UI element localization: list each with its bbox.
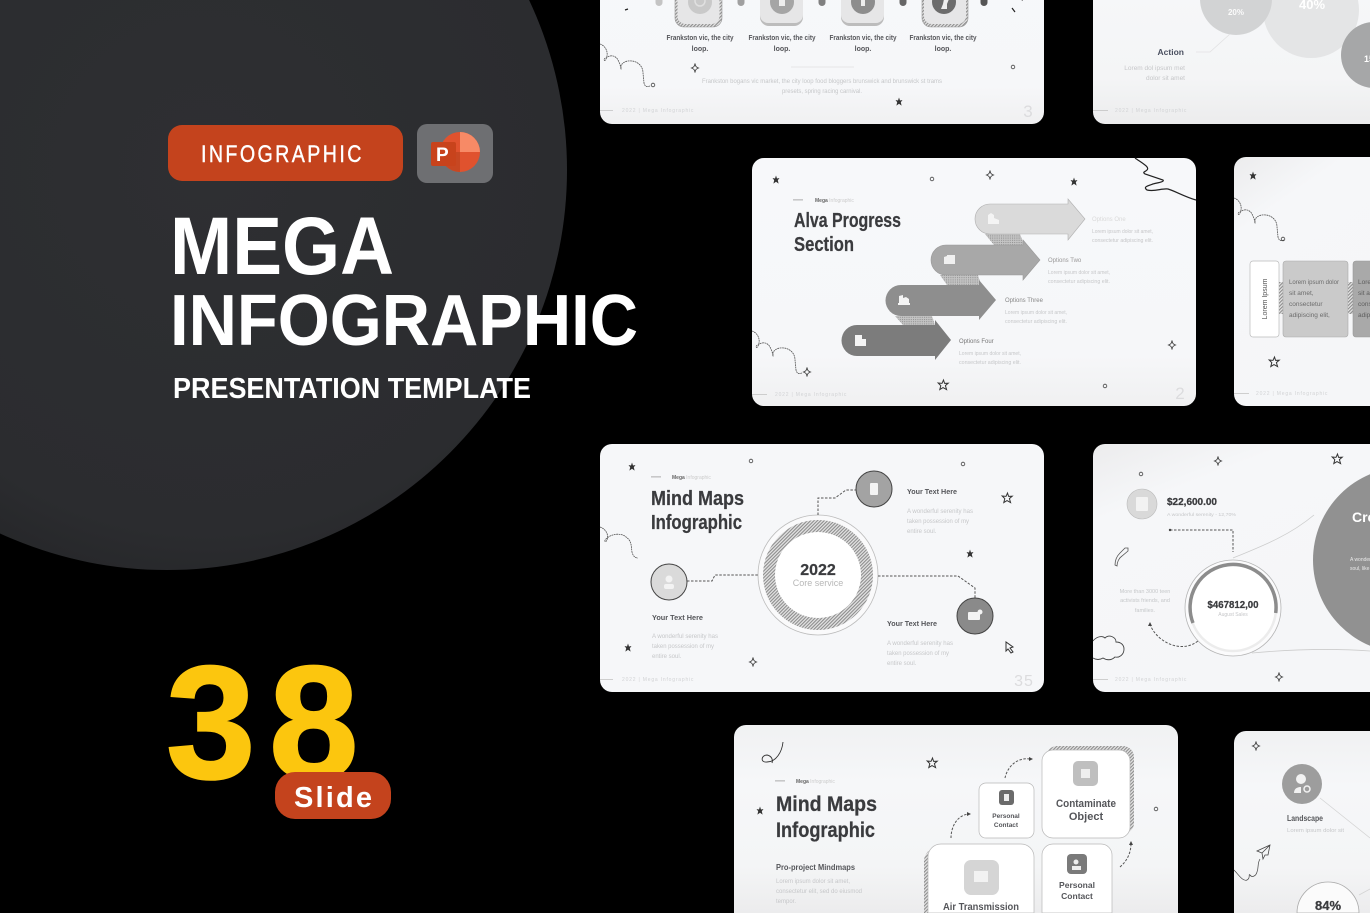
title: INFOGRAPHIC — [170, 281, 638, 361]
panel: Mind Maps 2022 slide — [600, 444, 1044, 692]
panel: Mind Maps 2022 slide: Mega Infographic — [672, 475, 711, 481]
panel: slide 3 icons row: 2022 | Mega Infographic — [622, 108, 694, 114]
panel: Alva Progress slide: 2 — [1175, 384, 1185, 403]
text: pro-project mindmaps: tempor. — [776, 899, 796, 905]
subtitle: PRESENTATION TEMPLATE — [173, 373, 531, 405]
panel: Lorem Ipsum process slide: Lorem Ipsum — [1262, 278, 1269, 319]
card: personal contact large: Personal — [1059, 880, 1095, 890]
badge: infographic: INFOGRAPHIC — [201, 140, 364, 167]
chart: august sales gauge: $467812,00 — [1208, 600, 1259, 611]
heading — [794, 210, 901, 256]
panel: slide 3 icons row: presets, spring racing carnival. — [782, 88, 862, 95]
chart: stepped arrows — [842, 199, 1085, 360]
text: pro-project mindmaps: consectetur elit, sed do eiusmod — [776, 889, 862, 895]
panel: slide 3 icons row: Frankston bogans vic market, the city loop food bloggers brunswick and brunswick st trams — [702, 78, 943, 85]
icon: left node — [651, 564, 687, 600]
panel: landscape slide: Landscape — [1287, 814, 1323, 823]
text: options: consectetur adipiscing elit. — [1005, 319, 1067, 325]
icon: PowerPoint logo: P — [436, 145, 449, 166]
chart: august sales gauge — [1185, 560, 1281, 656]
text: options — [959, 217, 1153, 366]
heading: Mind Maps — [651, 488, 744, 510]
text: your text here blocks: taken possession of my — [652, 644, 714, 650]
panel: slide 3 icons row: Frankston vic, the city — [666, 35, 734, 42]
panel: slide 3 icons row — [600, 0, 1044, 124]
text: options: Lorem ipsum dolor sit amet, — [1092, 229, 1153, 235]
panel: slide 3 icons row: loop. — [692, 46, 708, 53]
title — [170, 201, 638, 361]
panel: Mind Maps 2022 slide: 35 — [1014, 673, 1034, 690]
panel: Lorem Ipsum process slide: consectetur — [1289, 301, 1323, 308]
panel: slide action bubbles — [1093, 0, 1370, 124]
card: air transmission: Air Transmission — [943, 902, 1019, 913]
panel: Lorem Ipsum process slide: 2022 | Mega Infographic — [1256, 391, 1328, 397]
chart: 84 percent circle: 84% — [1315, 898, 1341, 913]
heading — [651, 488, 744, 534]
heading: Section — [794, 234, 854, 256]
panel: Alva Progress slide: Mega Infographic — [815, 198, 854, 204]
icon: wallet circle — [1127, 489, 1157, 519]
panel: slide action bubbles: 20% — [1228, 8, 1244, 17]
icon: rocket — [1115, 548, 1128, 566]
heading: Infographic — [651, 512, 742, 534]
heading: Infographic — [776, 819, 875, 842]
icon: paper plane — [1257, 845, 1270, 859]
card: small personal contact: Contact — [994, 822, 1019, 829]
card: contaminate object: Object — [1069, 811, 1103, 823]
text: options: Options Two — [1048, 258, 1082, 264]
chart: august sales gauge: August Sales — [1218, 612, 1248, 618]
text: your text here blocks: A wonderful serenity has — [652, 634, 718, 640]
text: options: Options One — [1092, 217, 1126, 223]
text: your text here blocks: taken possession of my — [907, 519, 969, 525]
panel: slide 3 icons row: Frankston vic, the city — [748, 35, 816, 42]
icon: PowerPoint logo — [417, 124, 493, 183]
slide count number: 3 — [166, 633, 256, 813]
panel: Mind Maps 2022 slide: 2022 | Mega Infographic — [622, 677, 694, 683]
panel: sales slide: A wonderful serenity - 12,70% — [1167, 512, 1237, 518]
panel: slide 3 icons row: 3 — [1023, 102, 1033, 121]
chart: core circle: Core service — [793, 578, 843, 588]
panel: sales slide: $22,600.00 — [1167, 497, 1217, 508]
title: MEGA — [170, 201, 394, 292]
panel: Alva Progress slide: 2022 | Mega Infographic — [775, 392, 847, 398]
text: options: consectetur adipiscing elit. — [1092, 238, 1153, 244]
text: options: Lorem ipsum dolor sit amet, — [1005, 310, 1067, 316]
text: pro-project mindmaps: Pro-project Mindmaps — [776, 863, 856, 872]
panel: sales slide — [1093, 444, 1370, 692]
panel: Lorem Ipsum process slide — [1234, 157, 1370, 406]
panel: sales slide: families. — [1135, 608, 1156, 614]
heading — [776, 793, 877, 842]
panel: sales slide: 2022 | Mega Infographic — [1115, 677, 1187, 683]
text: your text here blocks: taken possession of my — [887, 651, 949, 657]
panel: slide action bubbles: Action — [1158, 47, 1184, 57]
panel: Alva Progress slide — [752, 158, 1196, 406]
card: personal contact large — [1042, 844, 1112, 913]
card: small personal contact: Personal — [992, 813, 1020, 820]
panel: slide 3 icons row: loop. — [774, 46, 790, 53]
text: your text here blocks: entire soul. — [652, 654, 682, 660]
panel: Mind Maps boxes slide — [734, 725, 1178, 913]
panel: sales slide: activists friends, and — [1120, 598, 1170, 604]
icon: right node — [957, 598, 993, 634]
chart: core circle: 2022 — [800, 562, 836, 579]
decorative marks — [752, 158, 1196, 390]
card: contaminate object: Contaminate — [1056, 798, 1116, 810]
panel: Lorem Ipsum process slide: Lorem ipsum dolor — [1289, 279, 1340, 286]
panel: landscape slide — [1234, 731, 1370, 913]
text: options: Options Four — [959, 339, 994, 345]
panel: slide action bubbles: 2022 | Mega Infographic — [1115, 108, 1187, 114]
panel: slide 3 icons row: loop. — [935, 46, 951, 53]
heading: Mind Maps — [776, 793, 877, 816]
dark circle backdrop — [0, 0, 567, 570]
card: small personal contact — [979, 783, 1034, 838]
heading: Alva Progress — [794, 210, 901, 232]
panel: Mind Maps boxes slide: Mega Infographic — [796, 779, 835, 785]
panel: landscape slide: Lorem ipsum dolor sit — [1287, 828, 1345, 834]
panel: sales slide: More than 3000 teen — [1120, 589, 1170, 595]
icon: top node — [856, 471, 892, 507]
panel: slide action bubbles: Lorem dol ipsum met — [1124, 65, 1185, 72]
text: your text here blocks: Your Text Here — [887, 621, 937, 628]
icon: landscape circle — [1282, 764, 1322, 804]
text: options: Lorem ipsum dolor sit amet, — [1048, 270, 1110, 276]
card: personal contact large: Contact — [1061, 891, 1093, 901]
slide count number — [166, 633, 359, 813]
text: pro-project mindmaps — [776, 863, 862, 905]
panel: Lorem Ipsum process slide: adipiscing elit, — [1289, 312, 1330, 319]
text: options: consectetur adipiscing elit. — [1048, 279, 1110, 285]
panel: slide 3 icons row: Frankston vic, the city — [830, 35, 897, 42]
panel: slide 3 icons row: Frankston vic, the city — [910, 35, 977, 42]
panel: slide 3 icons row: loop. — [855, 46, 871, 53]
text: your text here blocks: entire soul. — [887, 661, 917, 667]
panel: slide action bubbles: dolor sit amet — [1146, 75, 1185, 82]
card: air transmission — [924, 844, 1034, 913]
chart: 84 percent circle — [1297, 882, 1359, 913]
card: contaminate object — [1042, 746, 1134, 838]
text: your text here blocks: A wonderful serenity has — [907, 509, 973, 515]
icon: cloud — [1093, 636, 1124, 660]
text: your text here blocks: Your Text Here — [652, 615, 703, 622]
badge: infographic — [168, 125, 403, 181]
chart: core circle — [758, 515, 878, 635]
text: options: Lorem ipsum dolor sit amet, — [959, 351, 1021, 357]
panel: sales slide: soul, like — [1350, 566, 1370, 572]
text: options: consectetur adipiscing elit. — [959, 360, 1021, 366]
slide count number: 8 — [269, 633, 359, 813]
text: your text here blocks: A wonderful serenity has — [887, 641, 953, 647]
badge: slide — [275, 772, 391, 819]
text: your text here blocks: entire soul. — [907, 529, 937, 535]
text: pro-project mindmaps: Lorem ipsum dolor sit amet, — [776, 879, 850, 885]
text: your text here blocks — [652, 489, 973, 667]
panel: Lorem Ipsum process slide: sit amet, — [1289, 290, 1314, 297]
badge: slide: Slide — [294, 782, 372, 814]
text: options: Options Three — [1005, 298, 1044, 304]
text: your text here blocks: Your Text Here — [907, 489, 957, 496]
